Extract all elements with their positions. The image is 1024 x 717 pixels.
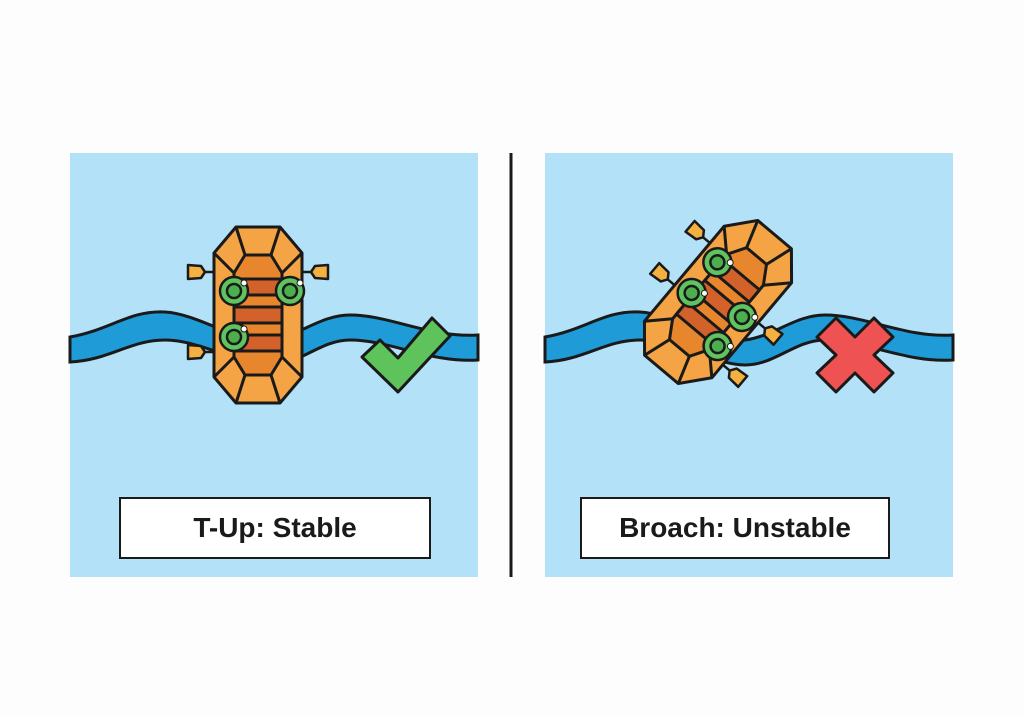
wave right: [545, 312, 953, 365]
raft: T-up: [188, 227, 328, 403]
icon: check mark: [362, 318, 450, 392]
label: Broach Unstable: Broach: Unstable: [619, 512, 851, 543]
label: T-Up Stable: [119, 497, 431, 559]
raft: broached: [608, 190, 828, 414]
label: Broach Unstable: [580, 497, 890, 559]
divider: [510, 153, 512, 577]
wave left: [70, 312, 478, 365]
icon: cross mark: [817, 318, 893, 392]
panel: broach unstable: [545, 153, 953, 577]
panel: T-Up stable: [70, 153, 478, 577]
label: T-Up Stable: T-Up: Stable: [193, 512, 357, 543]
